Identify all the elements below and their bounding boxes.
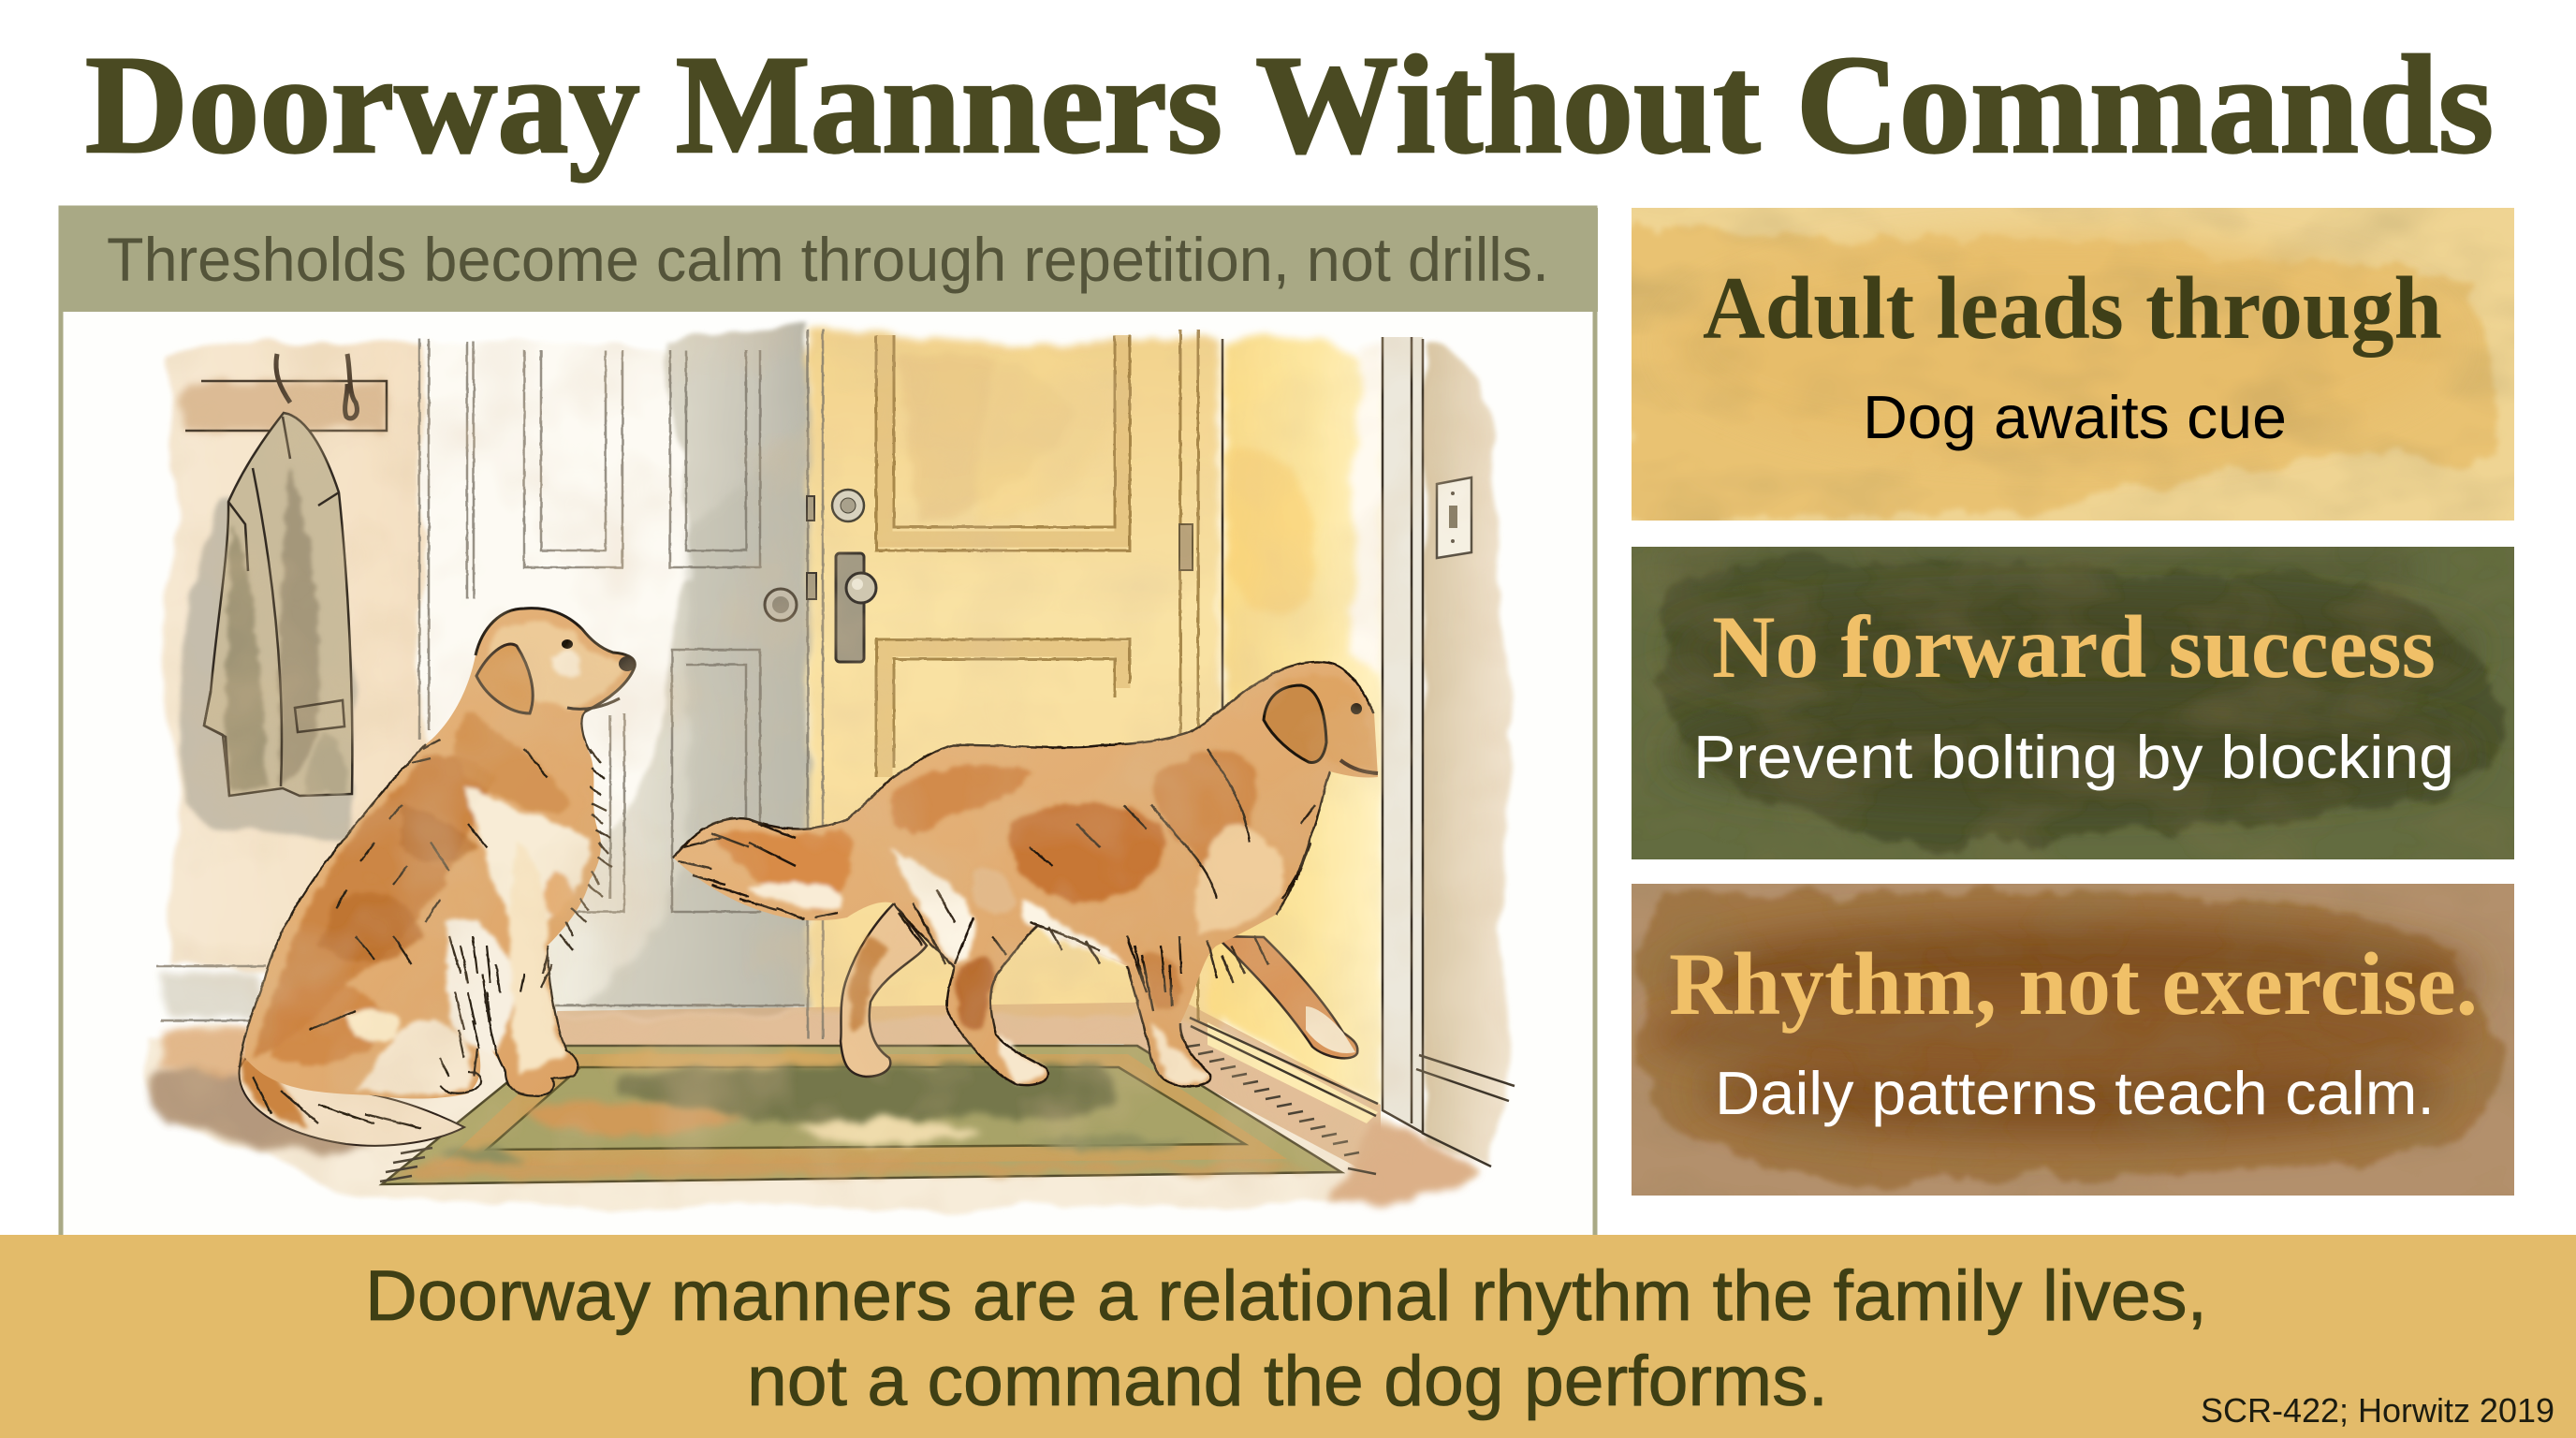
panel frame xyxy=(61,208,1595,1247)
coat xyxy=(182,413,352,840)
ear xyxy=(476,644,533,713)
yellow door xyxy=(809,330,1222,1037)
yellow door panel moulding xyxy=(885,335,1122,777)
illustration: doorway scene xyxy=(145,329,1515,1208)
floor washes xyxy=(145,1016,1479,1208)
grey door wash xyxy=(524,329,811,1013)
right wall wash xyxy=(1421,343,1509,1167)
eye and mouth xyxy=(1351,703,1362,714)
body xyxy=(245,609,635,1099)
panel: subtitle banner xyxy=(59,208,1598,312)
fur line work xyxy=(240,712,612,1128)
coat rack xyxy=(181,354,388,431)
footer band xyxy=(0,1235,2576,1438)
card: rhythm not exercise xyxy=(1632,884,2514,1196)
panel: doorway illustration xyxy=(61,208,1595,1247)
card heading: Rhythm, not exercise. xyxy=(1669,934,2478,1034)
face details xyxy=(476,609,636,712)
title: Doorway Manners Without Commands xyxy=(85,27,2494,183)
card heading: No forward success xyxy=(1712,597,2436,697)
left door xyxy=(421,339,693,1011)
takeaway line two: not a command the dog performs. xyxy=(747,1342,1828,1421)
card: adult leads through xyxy=(1624,208,2514,524)
left wall wash xyxy=(162,344,427,968)
card: no forward success xyxy=(1632,547,2514,859)
card wash xyxy=(1632,884,2514,1196)
body with head and tail xyxy=(673,662,1378,1086)
door frame xyxy=(1382,337,1423,1133)
takeaway line one: Doorway manners are a relational rhythm the family lives, xyxy=(365,1256,2207,1336)
icon: light switch xyxy=(1437,477,1471,558)
card body text: Dog awaits cue xyxy=(1863,383,2287,451)
outline and fur strokes xyxy=(673,662,1374,1086)
card body text: Prevent bolting by blocking xyxy=(1693,723,2454,791)
card wash xyxy=(1624,208,2514,524)
far legs xyxy=(841,903,927,1077)
card heading: Adult leads through xyxy=(1703,258,2442,358)
source citation: SCR-422; Horwitz 2019 xyxy=(2201,1391,2554,1430)
sunlit opening xyxy=(1208,336,1383,1114)
dog: walking golden retriever xyxy=(673,662,1378,1086)
dog: seated golden retriever xyxy=(240,609,636,1146)
card body text: Daily patterns teach calm. xyxy=(1715,1059,2435,1127)
door hardware xyxy=(765,490,1193,662)
head shading xyxy=(487,622,627,707)
tail xyxy=(240,1049,464,1146)
door and wall line work xyxy=(156,330,823,1039)
rug xyxy=(382,1046,1341,1184)
subtitle text: Thresholds become calm through repetition, not drills. xyxy=(107,225,1549,294)
ear xyxy=(1264,685,1326,762)
card wash xyxy=(1632,547,2514,859)
rug fringe xyxy=(380,1045,1376,1181)
